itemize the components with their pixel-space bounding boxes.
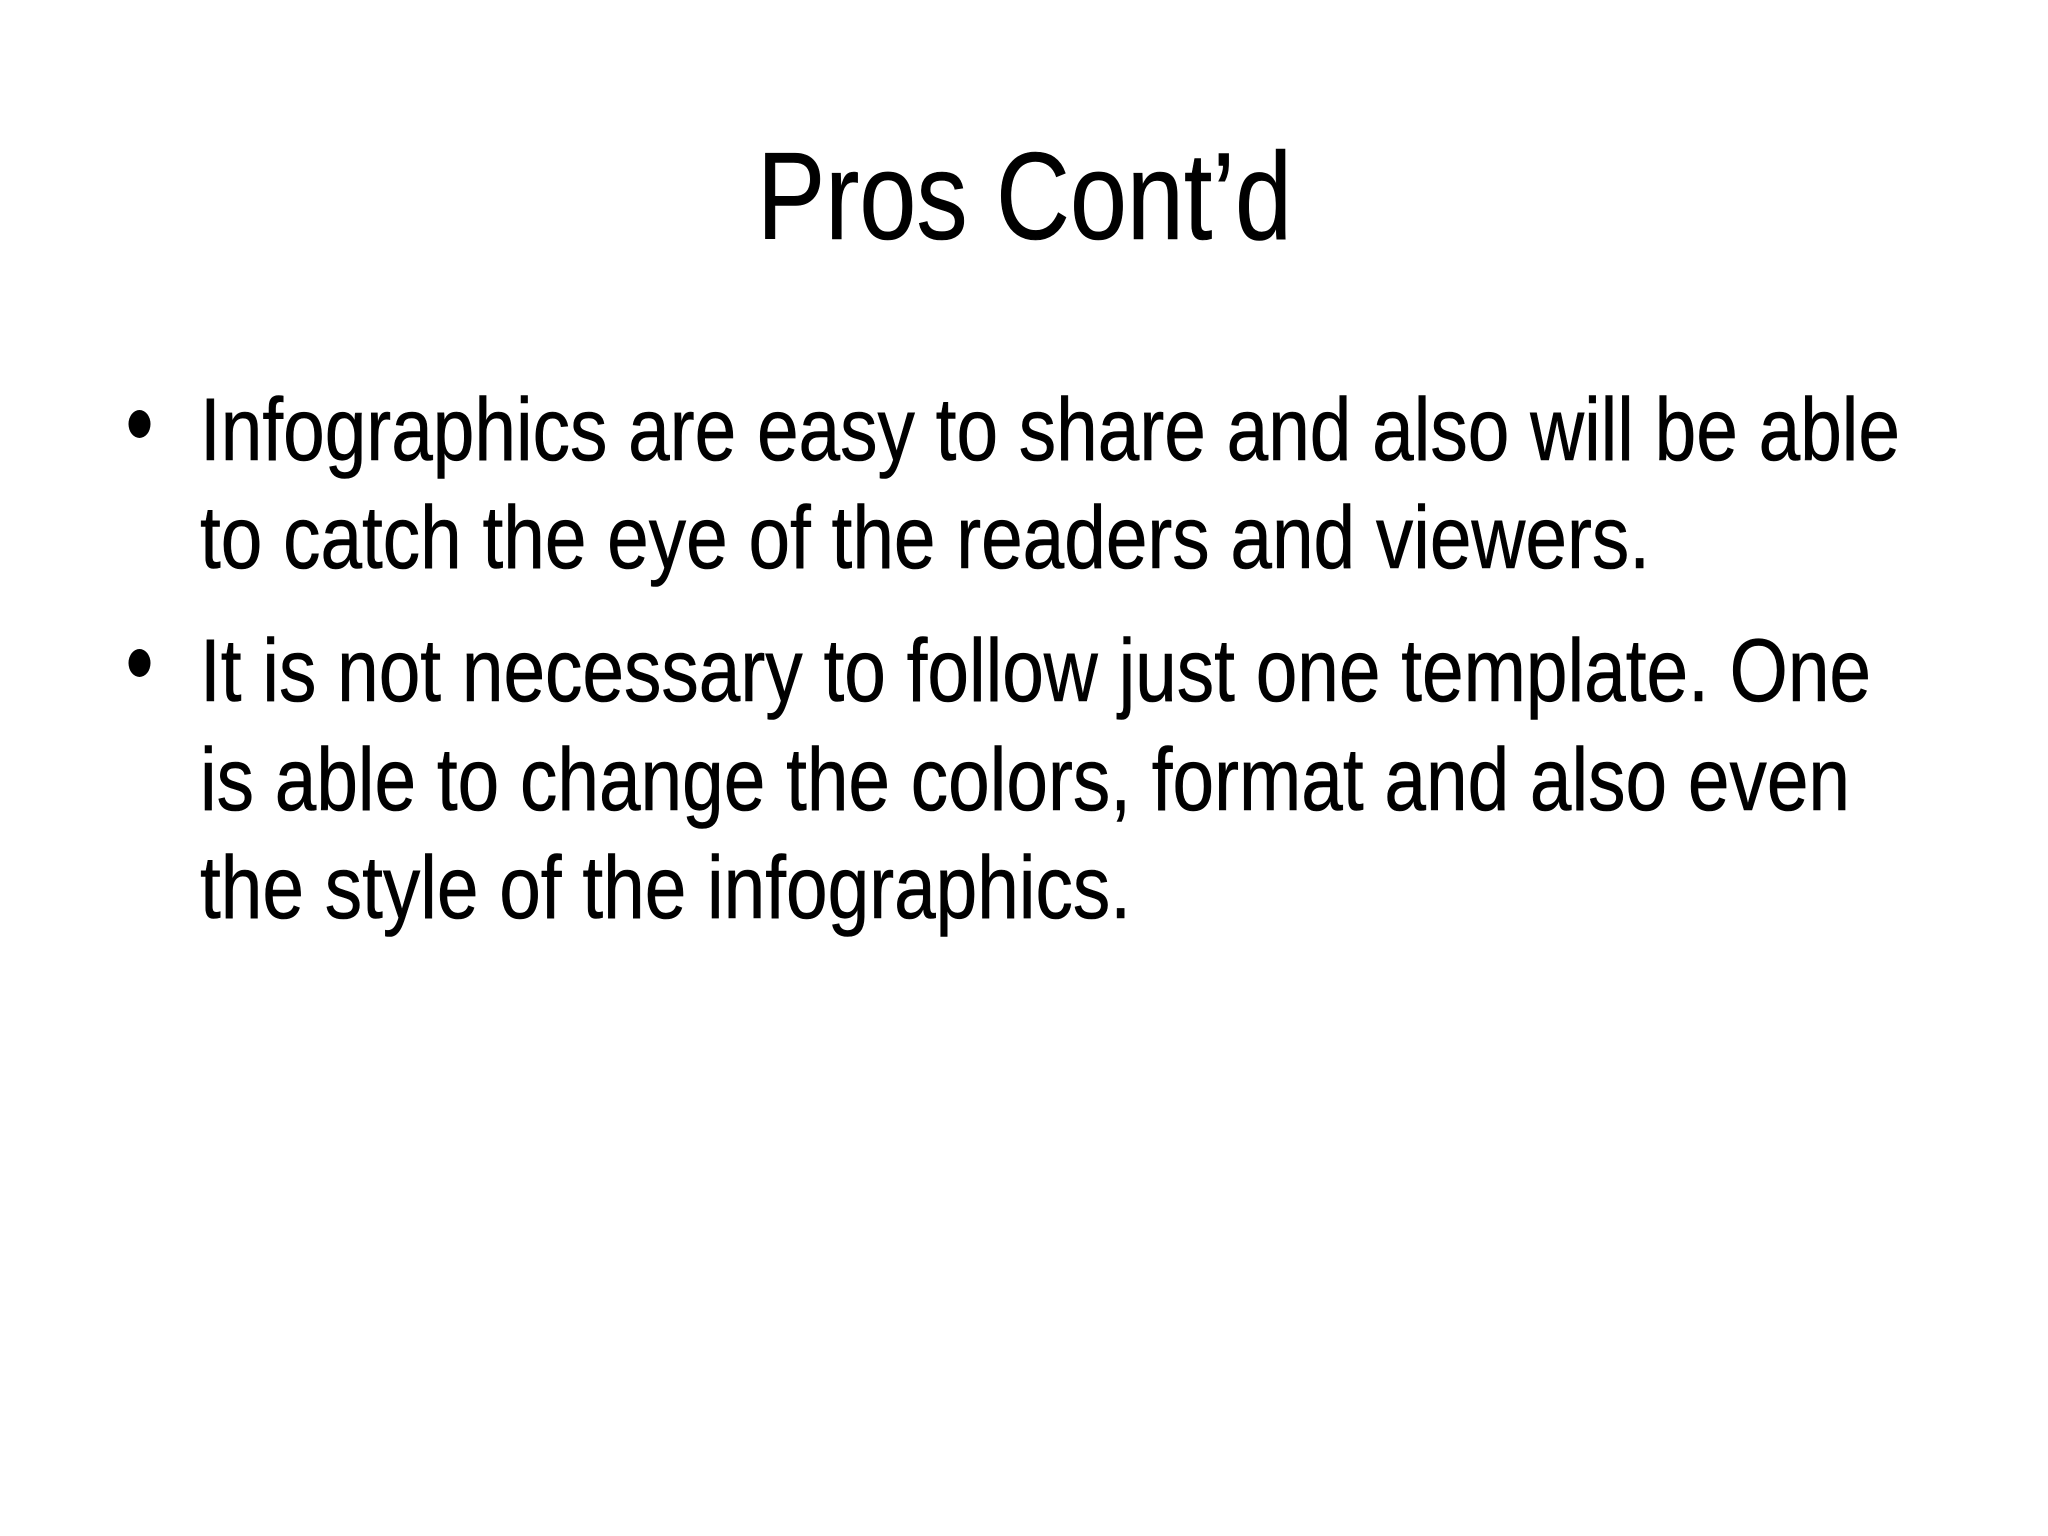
title: Pros Cont’d [757, 128, 1292, 266]
bullet text 1: to catch the eye of the readers and viewers. [200, 487, 1650, 587]
bullet item 2 [128, 620, 1871, 937]
bullet text 1 [200, 379, 1900, 587]
bullet text 2 [200, 620, 1871, 937]
bullet list [128, 379, 1900, 937]
bullet marker 1 [128, 410, 150, 438]
bullet item 1 [128, 379, 1900, 587]
bullet text 2: the style of the infographics. [200, 837, 1131, 937]
bullet marker 2 [128, 649, 150, 677]
